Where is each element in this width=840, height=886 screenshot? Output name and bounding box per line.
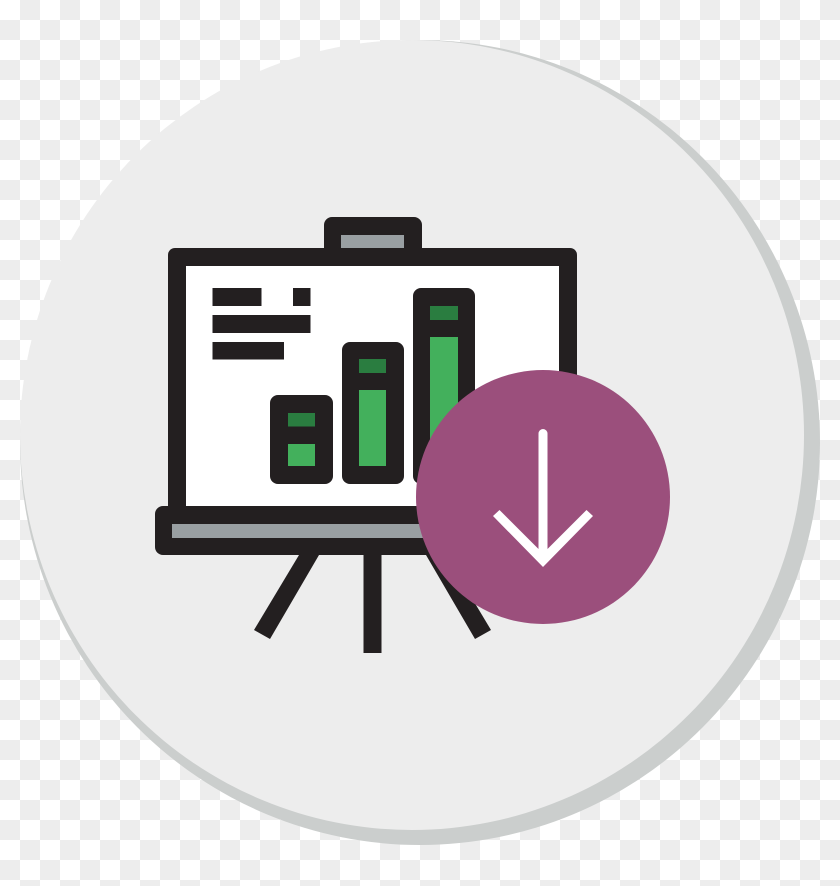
download arrow: [493, 429, 593, 567]
board base tray: [155, 506, 590, 555]
bar: short: [270, 395, 333, 484]
board screen: [168, 248, 577, 523]
bar: tall: [413, 288, 475, 484]
text lines on board: [212, 288, 310, 360]
icon: presentation board with bar chart: [155, 217, 590, 653]
bar: medium: [342, 342, 404, 484]
board top clip: [324, 217, 422, 262]
easel legs: [254, 555, 491, 653]
icon: download badge: [416, 370, 670, 624]
